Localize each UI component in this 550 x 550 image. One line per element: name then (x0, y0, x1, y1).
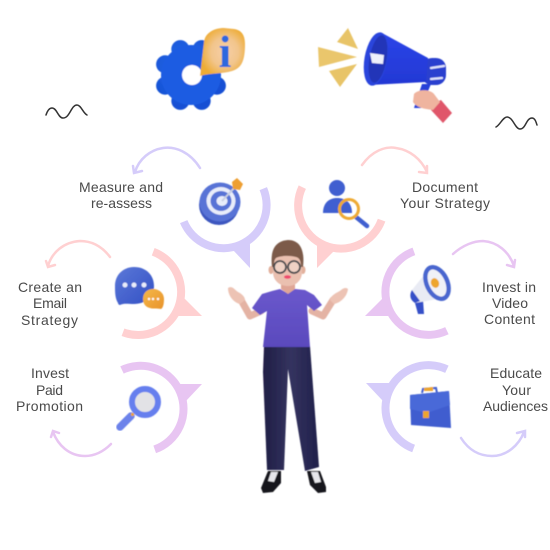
icon: chat bubbles (115, 267, 164, 309)
label: measure: Measure and (79, 179, 163, 195)
ring: video (385, 251, 447, 335)
shirt (252, 289, 322, 347)
label: email: Email (33, 295, 67, 311)
pants (263, 346, 319, 471)
label: educate: Educate (490, 365, 542, 381)
label: measure: re-assess (91, 195, 152, 211)
icon: gear with info bubble (161, 26, 245, 105)
glasses (274, 261, 300, 273)
icon: gear with info bubble: i (219, 26, 232, 77)
label: video: Invest in (482, 279, 536, 295)
icon: small megaphone (410, 260, 456, 314)
panel: document your strategy (298, 148, 490, 268)
panel: invest in video content (365, 241, 536, 335)
icon: person with magnifier (323, 180, 367, 226)
mouth (284, 275, 291, 279)
panel: invest paid promotion (16, 365, 202, 456)
label: video: Video (492, 295, 528, 311)
icon: megaphone with hand (318, 28, 452, 123)
label: email (18, 279, 82, 328)
squiggle: top left (46, 105, 87, 118)
neck (281, 281, 295, 294)
label: measure (79, 179, 163, 211)
character: man shrugging (228, 240, 348, 493)
label: email: Create an (18, 279, 82, 295)
label: video: Content (484, 311, 535, 327)
label: document: Document (412, 179, 478, 195)
arrow: educate (461, 431, 525, 456)
ring: document (298, 187, 382, 249)
squiggle: top right (496, 117, 537, 129)
arms (241, 300, 333, 316)
arrow: video (453, 241, 515, 267)
arrow: email (46, 241, 110, 267)
icon: briefcase (410, 387, 451, 428)
shoes (261, 471, 281, 493)
panel: measure and re-assess (79, 148, 267, 268)
label: document: Your Strategy (400, 195, 490, 211)
icon: magnifier (120, 389, 158, 427)
label: paid: Promotion (16, 398, 83, 414)
panel: educate your audiences (366, 365, 548, 456)
ring: paid (122, 366, 184, 449)
icon: target (199, 178, 243, 225)
ring: educate (385, 365, 447, 448)
ring: measure (184, 189, 267, 248)
label: video (482, 279, 536, 327)
arrow: measure (133, 148, 200, 173)
label: document (400, 179, 490, 211)
hair (272, 240, 303, 267)
label: educate (483, 365, 548, 414)
arrow: paid (51, 431, 111, 456)
ring: email (123, 252, 181, 335)
label: paid: Paid (36, 382, 63, 398)
label: educate: Your (502, 382, 531, 398)
panel: create an email strategy (18, 241, 202, 335)
label: educate: Audiences (483, 398, 548, 414)
label: paid (16, 365, 83, 414)
label: paid: Invest (31, 365, 69, 381)
arrow: document (362, 148, 427, 173)
head (268, 266, 274, 274)
label: email: Strategy (21, 312, 78, 328)
